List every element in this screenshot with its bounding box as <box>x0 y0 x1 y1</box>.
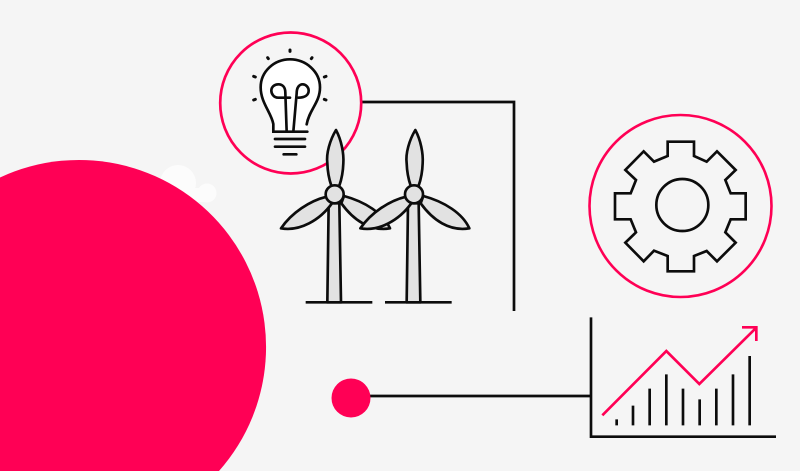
light bulb <box>254 50 326 154</box>
pink ring <box>590 115 772 297</box>
connector line: bulb to bottom <box>362 102 514 311</box>
icon: gear in circle <box>590 115 772 297</box>
turbine right <box>360 130 469 302</box>
pink ring <box>220 32 361 174</box>
connector line: dot to chart <box>332 378 592 418</box>
trend arrow <box>602 327 756 415</box>
chart axes <box>591 317 776 437</box>
icon: light bulb in circle <box>220 32 361 174</box>
chart: rising bars and arrow <box>591 317 776 437</box>
icon: wind turbines <box>281 130 469 302</box>
turbine left <box>281 130 390 302</box>
icon: white cloud <box>160 165 216 202</box>
chart bars <box>617 356 750 425</box>
large pink circle <box>0 160 266 471</box>
gear <box>615 142 746 271</box>
pink dot <box>332 378 370 418</box>
